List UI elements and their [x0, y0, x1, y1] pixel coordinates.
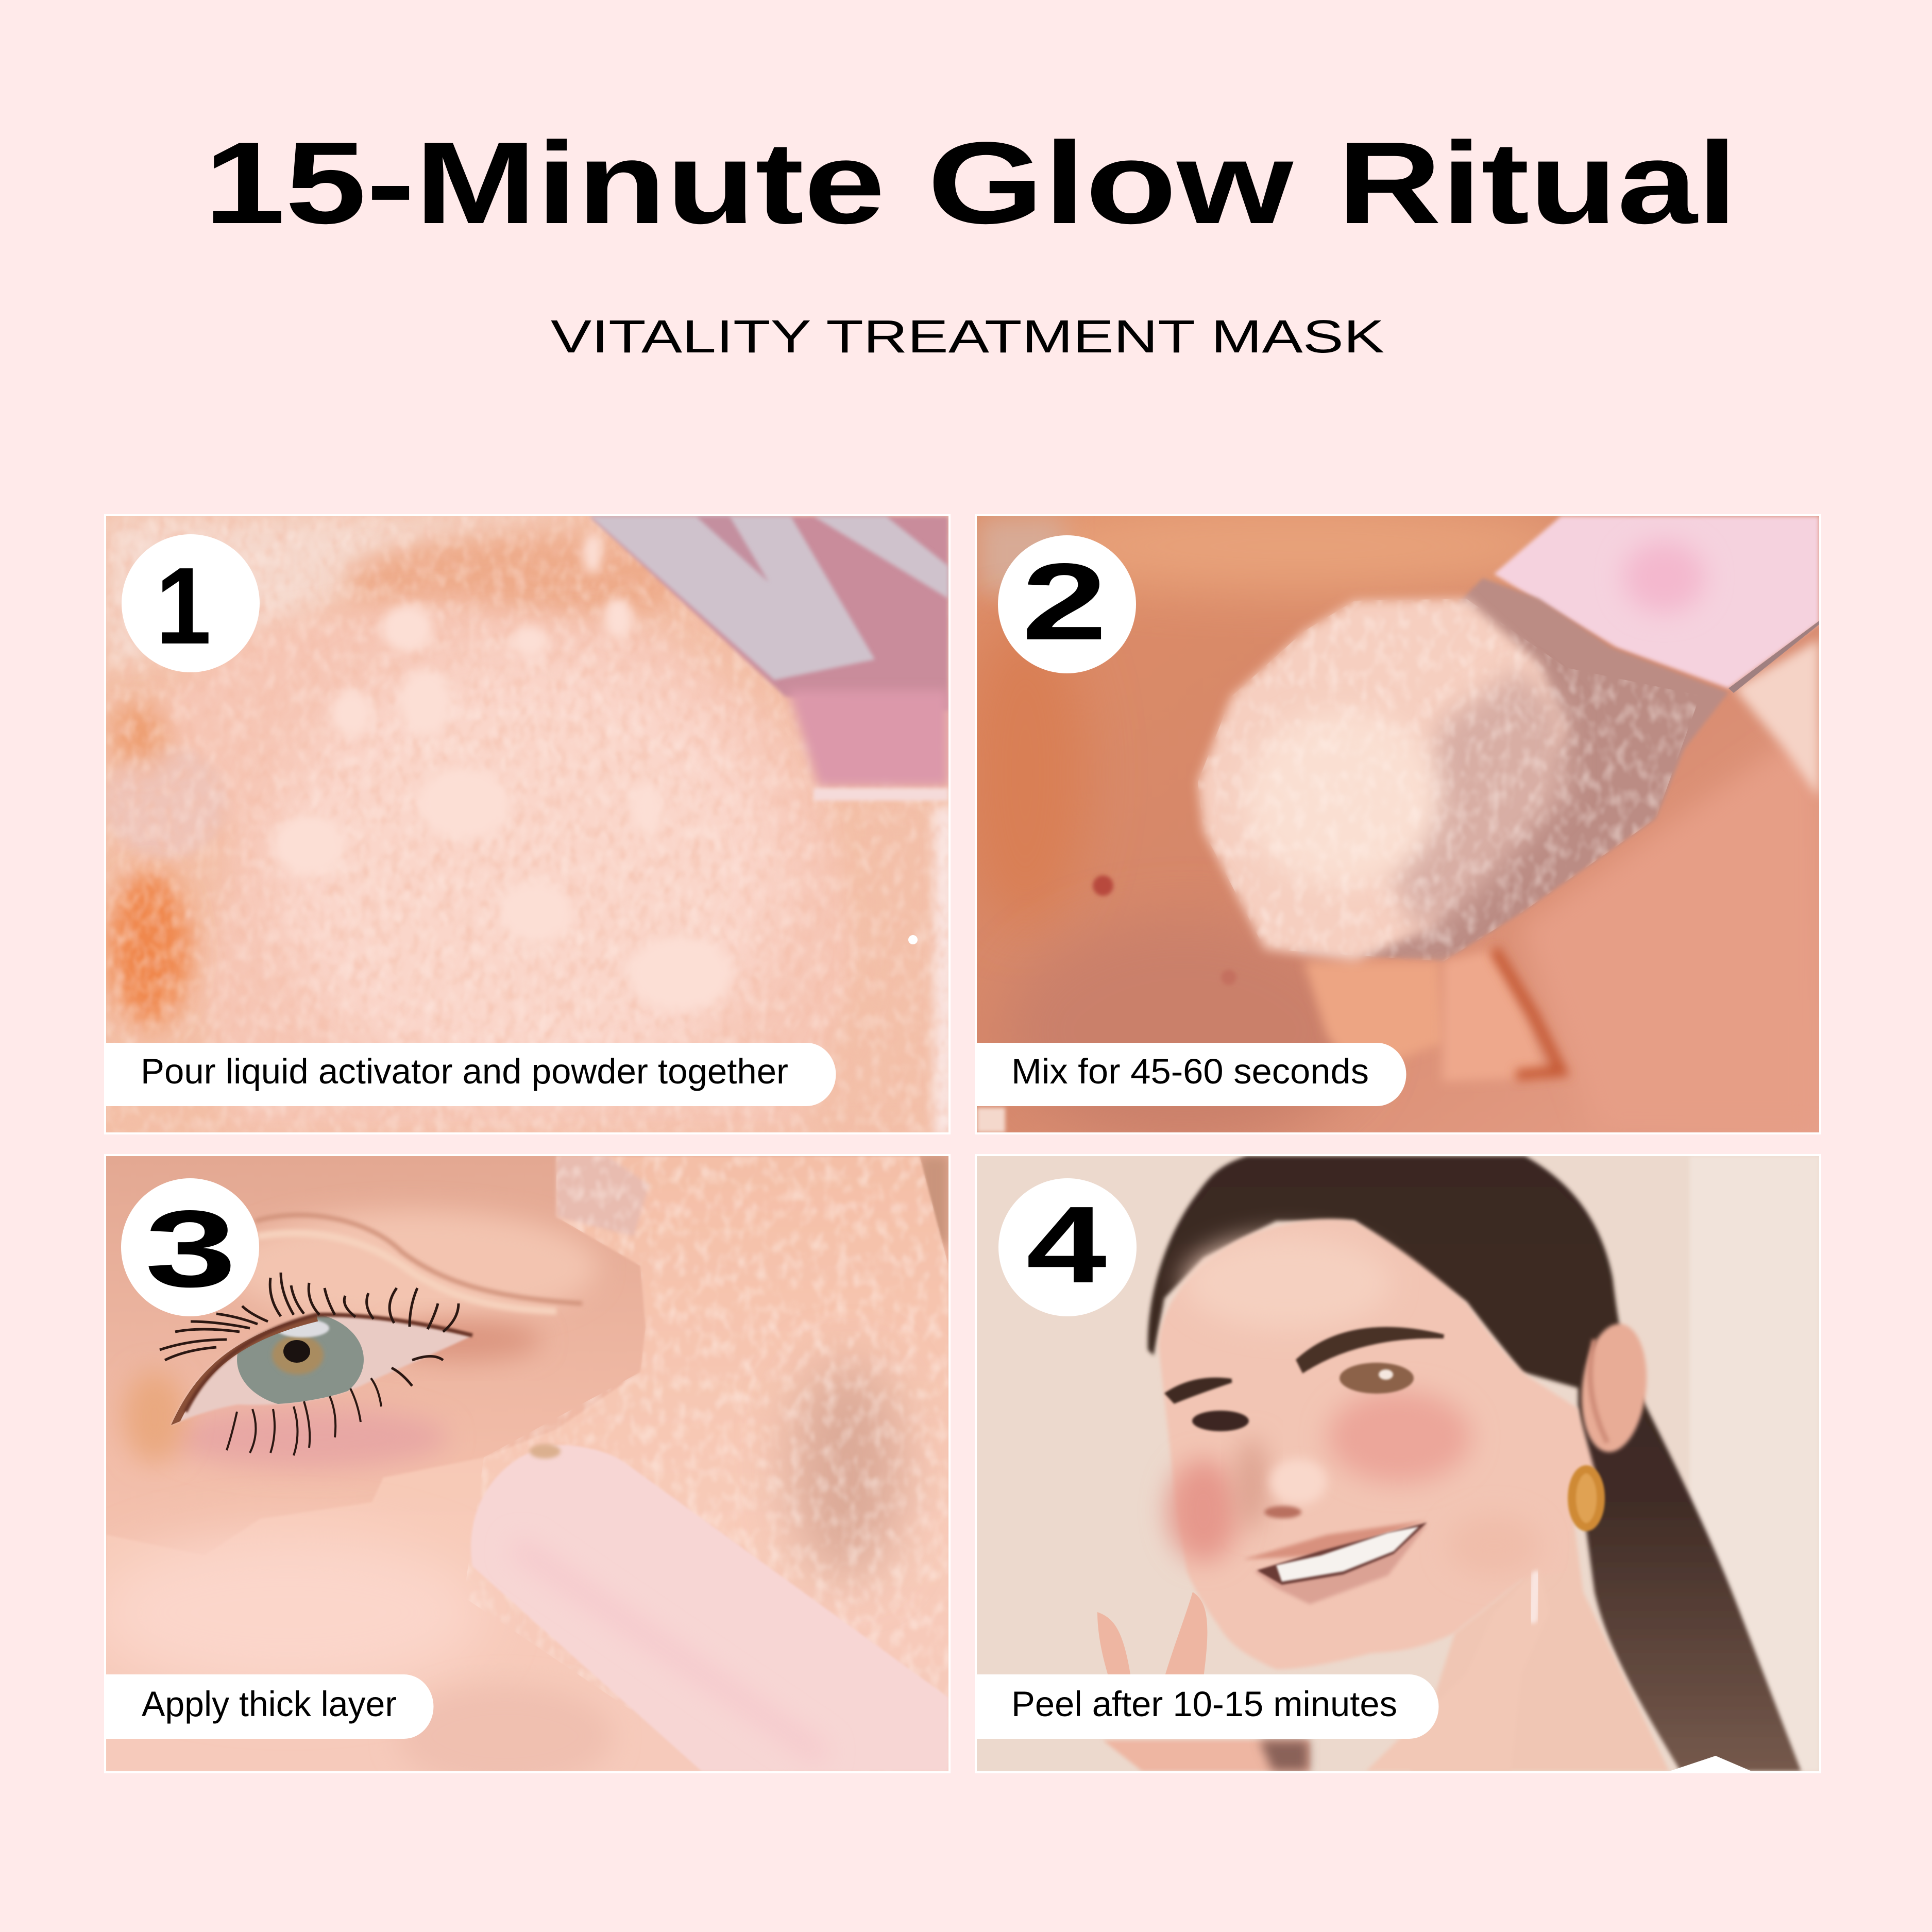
- photo: spatula lifting mixed mask: [963, 500, 1819, 1144]
- mouth: [1243, 1520, 1427, 1560]
- subtitle: VITALITY TREATMENT MASK: [551, 311, 1384, 363]
- number badge 1: [122, 534, 260, 672]
- hands: [1097, 1567, 1550, 1771]
- panel: step 1: [104, 514, 954, 1136]
- number badge 2: [998, 535, 1136, 673]
- caption 2: Mix for 45-60 seconds: [1011, 1052, 1369, 1091]
- photo: smiling woman after peel: [977, 1156, 1819, 1771]
- caption 3: Apply thick layer: [142, 1684, 397, 1724]
- neck: [1410, 1511, 1669, 1771]
- caption 2: [977, 1043, 1406, 1106]
- mask layer: [93, 1156, 948, 1788]
- title: 15-Minute: [204, 117, 885, 248]
- title: Glow: [927, 117, 1294, 248]
- caption 3: [106, 1674, 433, 1739]
- number badge 3: [121, 1178, 259, 1316]
- panel: step 2: [963, 500, 1821, 1144]
- nose: [1236, 1437, 1267, 1530]
- eyes: [1340, 1363, 1414, 1394]
- hair: [1148, 1156, 1801, 1771]
- eyelashes: [160, 1273, 459, 1455]
- caption 4: [977, 1674, 1438, 1739]
- caption 4: Peel after 10-15 minutes: [1011, 1684, 1397, 1724]
- earring: [1572, 1469, 1601, 1527]
- panel: step 4: [975, 1154, 1821, 1773]
- number badge 3: 3: [145, 1188, 236, 1310]
- spatula in bowl: [590, 516, 948, 801]
- caption 1: [106, 1043, 836, 1106]
- number badge 4: 4: [1026, 1183, 1107, 1306]
- number badge 1: 1: [156, 545, 211, 667]
- face: [1159, 1219, 1653, 1669]
- brows: [1298, 1329, 1444, 1370]
- photo: powder and liquid in bowl: [104, 516, 954, 1136]
- number badge 2: 2: [1022, 540, 1107, 663]
- eyelid and eye: [124, 1211, 598, 1468]
- panel: step 3: [93, 1154, 951, 1788]
- caption 1: Pour liquid activator and powder together: [141, 1052, 788, 1091]
- powder clumps: [273, 533, 732, 1011]
- spatula: [471, 1444, 948, 1771]
- ear: [1575, 1320, 1653, 1455]
- photo: mask applied near eye with spatula: [93, 1156, 948, 1788]
- title: Ritual: [1337, 117, 1737, 248]
- number badge 4: [998, 1178, 1137, 1316]
